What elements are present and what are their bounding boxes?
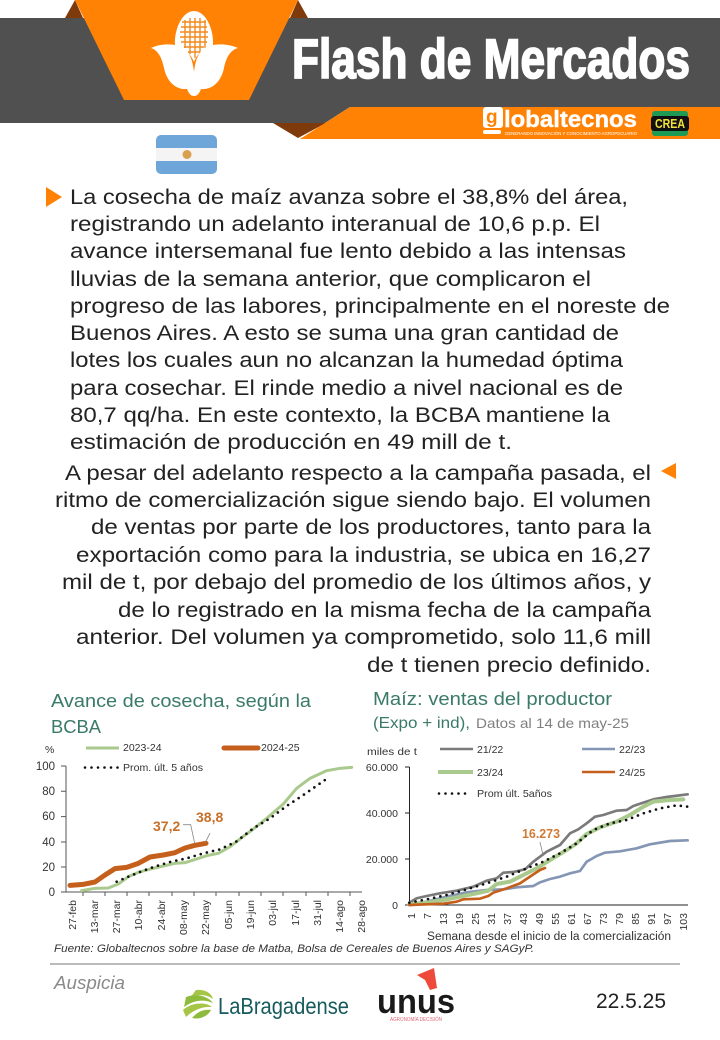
chart legend: 2023-24 [123, 742, 162, 754]
text block: harvest: registrando un adelanto interanual de 10,6 p.p. El [70, 212, 600, 236]
line chart: producer sales [366, 744, 690, 943]
text block: harvest: 80,7 qq/ha. En este contexto, la BCBA mantiene la [70, 403, 610, 427]
x axis weeks: 1 [406, 913, 418, 919]
chart legend: 21/22 [477, 744, 503, 756]
text block: harvest: para cosechar. El rinde medio a nivel nacional es de [70, 376, 623, 400]
text block: harvest: estimación de producción en 49 mill de t. [70, 430, 512, 454]
icon: arrow left [661, 463, 676, 479]
text block: commercialization: ritmo de comercialización sigue siendo bajo. El volumen [55, 488, 651, 512]
icon: Argentina flag [156, 135, 217, 174]
text block: harvest [70, 185, 670, 454]
text block: commercialization: mil de t, por debajo del promedio de los últimos años, y [62, 570, 651, 594]
line chart: harvest progress [36, 742, 368, 935]
chart axes and y labels: miles de t [367, 746, 417, 758]
x axis weeks: 79 [614, 913, 626, 925]
text block: harvest: Buenos Aires. A esto se suma una gran cantidad de [70, 321, 619, 345]
x axis weeks: 19 [454, 913, 466, 925]
chart legend: 23/24 [477, 767, 503, 779]
value label: 16.273 [522, 827, 560, 841]
chart axes and y labels: 100 [36, 761, 55, 773]
text block: harvest: La cosecha de maíz avanza sobre el 38,8% del área, [70, 185, 628, 209]
value labels: 38,8 [196, 809, 223, 825]
text block: commercialization: de lo registrado en la misma fecha de la campaña [118, 598, 651, 622]
x axis weeks: 43 [518, 913, 530, 925]
header banner [0, 0, 720, 139]
x axis weeks: 37 [502, 913, 514, 925]
x axis weeks: 91 [646, 913, 658, 925]
x axis dates: 10-abr [133, 900, 145, 930]
data series [409, 794, 688, 905]
sponsor label: Auspicia [53, 973, 125, 993]
x axis dates: 22-may [200, 899, 212, 935]
chart axes and y labels: 60.000 [366, 762, 398, 774]
x axis dates: 19-jun [245, 900, 257, 929]
chart axes and y labels: 40 [42, 837, 55, 849]
chart axes and y labels [36, 744, 362, 899]
text block: harvest: lluvias de la semana anterior, que complicaron el [70, 267, 591, 291]
logo: La Bragadense: LaBragadense [218, 993, 349, 1019]
value labels [153, 809, 223, 834]
x axis dates: 05-jun [223, 900, 235, 929]
chart axes and y labels [366, 746, 688, 912]
chart legend: 2024-25 [261, 742, 300, 754]
x axis dates: 24-abr [156, 900, 168, 930]
x axis dates: 31-jul [312, 900, 324, 926]
logo: CREA: CREA [655, 117, 685, 131]
text block: commercialization: exportación como para la industria, se ubica en 16,27 [76, 543, 651, 567]
x axis weeks: 61 [566, 913, 578, 925]
x axis dates: 17-jul [290, 900, 302, 926]
chart legend [438, 744, 645, 800]
source note: Fuente: Globaltecnos sobre la base de Matba, Bolsa de Cereales de Buenos Aires y SAGyP. [54, 943, 534, 955]
x axis dates: 08-may [178, 899, 190, 935]
text block: commercialization [55, 461, 651, 677]
x axis weeks: 73 [598, 913, 610, 925]
x axis dates: 27-mar [111, 900, 123, 933]
logo: Unus: AGRONOMÍA DECISIÓN [390, 1016, 442, 1023]
chart legend [85, 742, 300, 774]
text block: commercialization: de ventas por parte de los productores, tanto para la [91, 515, 651, 539]
logo: Unus: unus [377, 983, 455, 1021]
heading: sales chart: Datos al 14 de may-25 [476, 715, 629, 731]
heading: sales chart: (Expo + ind), [373, 715, 470, 732]
x axis weeks: 103 [678, 913, 690, 931]
chart axes and y labels: 80 [42, 786, 55, 798]
logo: CREA [651, 111, 689, 136]
text block: harvest: avance intersemanal fue lento debido a las intensas [70, 239, 626, 263]
chart legend: Prom últ. 5años [477, 788, 552, 800]
date: 22.5.25 [596, 990, 666, 1013]
chart legend: 24/25 [619, 767, 645, 779]
text block: commercialization: anterior. Del volumen ya comprometido, solo 11,6 mill [76, 625, 651, 649]
x axis weeks [406, 913, 690, 931]
x axis dates: 03-jul [267, 900, 279, 926]
text block: commercialization: de t tienen precio definido. [367, 653, 651, 677]
heading: harvest chart [51, 690, 312, 737]
data series [70, 767, 352, 891]
chart legend: Prom. últ. 5 años [123, 762, 203, 774]
logo: La Bragadense [183, 990, 349, 1019]
text block: commercialization: A pesar del adelanto respecto a la campaña pasada, el [65, 461, 651, 485]
chart axes and y labels: 60 [42, 811, 55, 823]
chart axes and y labels: 0 [49, 887, 55, 899]
x axis weeks: 7 [422, 913, 434, 919]
x axis weeks: 25 [470, 913, 482, 925]
x axis dates: 27-feb [67, 900, 79, 930]
x axis title: Semana desde el inicio de la comercialización [427, 931, 671, 943]
text block: harvest: progreso de las labores, principalmente en el noreste de [70, 294, 670, 318]
heading: harvest chart: BCBA [51, 716, 102, 737]
x axis weeks: 67 [582, 913, 594, 925]
x axis weeks: 31 [486, 913, 498, 925]
icon: arrow right [46, 187, 62, 207]
logo: Globaltecnos: g [486, 107, 498, 128]
heading: sales chart: Maíz: ventas del productor [373, 688, 612, 709]
heading: harvest chart: Avance de cosecha, según la [51, 690, 312, 711]
x axis weeks: 85 [630, 913, 642, 925]
x axis dates: 28-ago [356, 900, 368, 933]
chart axes and y labels: 20 [42, 862, 55, 874]
chart axes and y labels: 0 [392, 900, 398, 912]
text block: harvest: lotes los cuales aun no alcanzan la humedad óptima [70, 348, 623, 372]
logo: Globaltecnos: GENERANDO INNOVACIÓN Y CONOCIMIENTO AGROPECUARIO [505, 130, 637, 136]
logo: Unus [377, 968, 455, 1023]
icon: corn [151, 11, 238, 96]
chart axes and y labels: 20.000 [366, 854, 398, 866]
heading: sales chart [373, 688, 629, 732]
logo: Globaltecnos: lobaltecnos [504, 106, 637, 132]
x axis weeks: 97 [662, 913, 674, 925]
x axis dates: 14-ago [334, 900, 346, 933]
chart legend: 22/23 [619, 744, 645, 756]
chart axes and y labels: 40.000 [366, 808, 398, 820]
x axis weeks: 13 [438, 913, 450, 925]
x axis weeks: 55 [550, 913, 562, 925]
chart axes and y labels: % [45, 744, 54, 756]
x axis dates: 13-mar [89, 900, 101, 933]
value labels: 37,2 [153, 818, 180, 834]
x axis dates [67, 899, 368, 935]
x axis weeks: 49 [534, 913, 546, 925]
